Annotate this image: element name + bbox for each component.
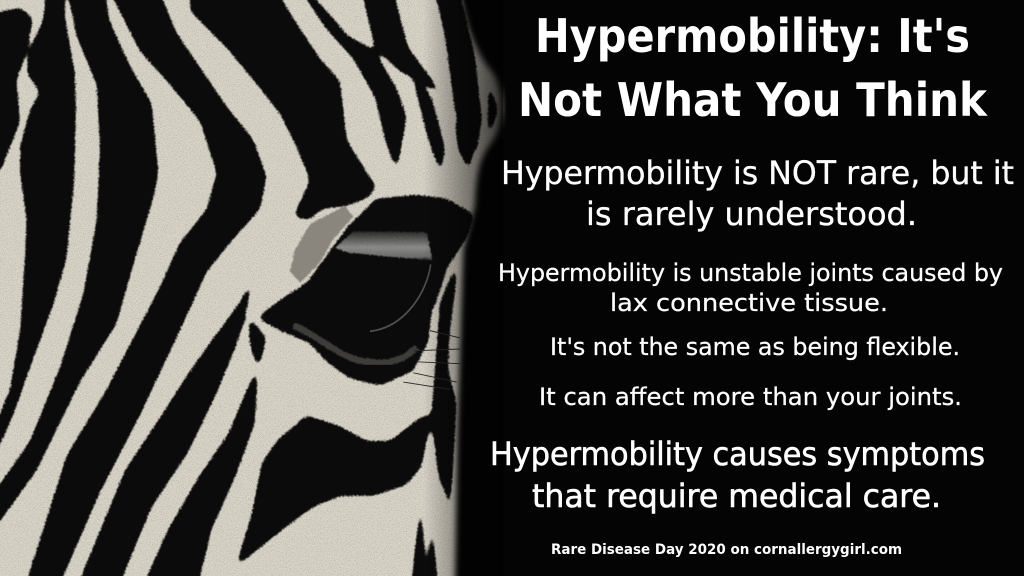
statement: definition: lax connective tissue. [610, 289, 888, 317]
title [518, 9, 988, 127]
right edge shading [423, 0, 503, 576]
black stripes [0, 0, 498, 576]
zebra coat base [0, 0, 501, 576]
title: Hypermobility: It's [535, 9, 970, 63]
footer credit: Rare Disease Day 2020 on cornallergygirl.com [551, 542, 902, 558]
statement: medical care [490, 435, 985, 515]
statement: definition: Hypermobility is unstable joints caused by [498, 259, 1003, 287]
title: Not What You Think [518, 73, 988, 127]
statement: definition [498, 259, 1003, 317]
eye socket [257, 195, 475, 386]
grey lid wrinkle [290, 206, 353, 283]
statement: not rare [501, 154, 1014, 233]
lower lid fur [293, 325, 417, 363]
statement: more than joints: It can affect more than your joints. [539, 383, 962, 411]
statement: not rare: is rarely understood. [586, 195, 917, 233]
statement: medical care: that require medical care. [532, 477, 941, 515]
eyelid highlight [335, 231, 433, 260]
statement: not rare: Hypermobility is NOT rare, but it [501, 154, 1014, 192]
statement: medical care: Hypermobility causes symptoms [490, 435, 985, 473]
whiskers [403, 331, 460, 389]
statement: not flexibility: It's not the same as being flexible. [550, 333, 960, 361]
fur speckle [0, 0, 500, 576]
zebra face photo illustration [0, 0, 503, 576]
eye lower rim [370, 264, 431, 331]
